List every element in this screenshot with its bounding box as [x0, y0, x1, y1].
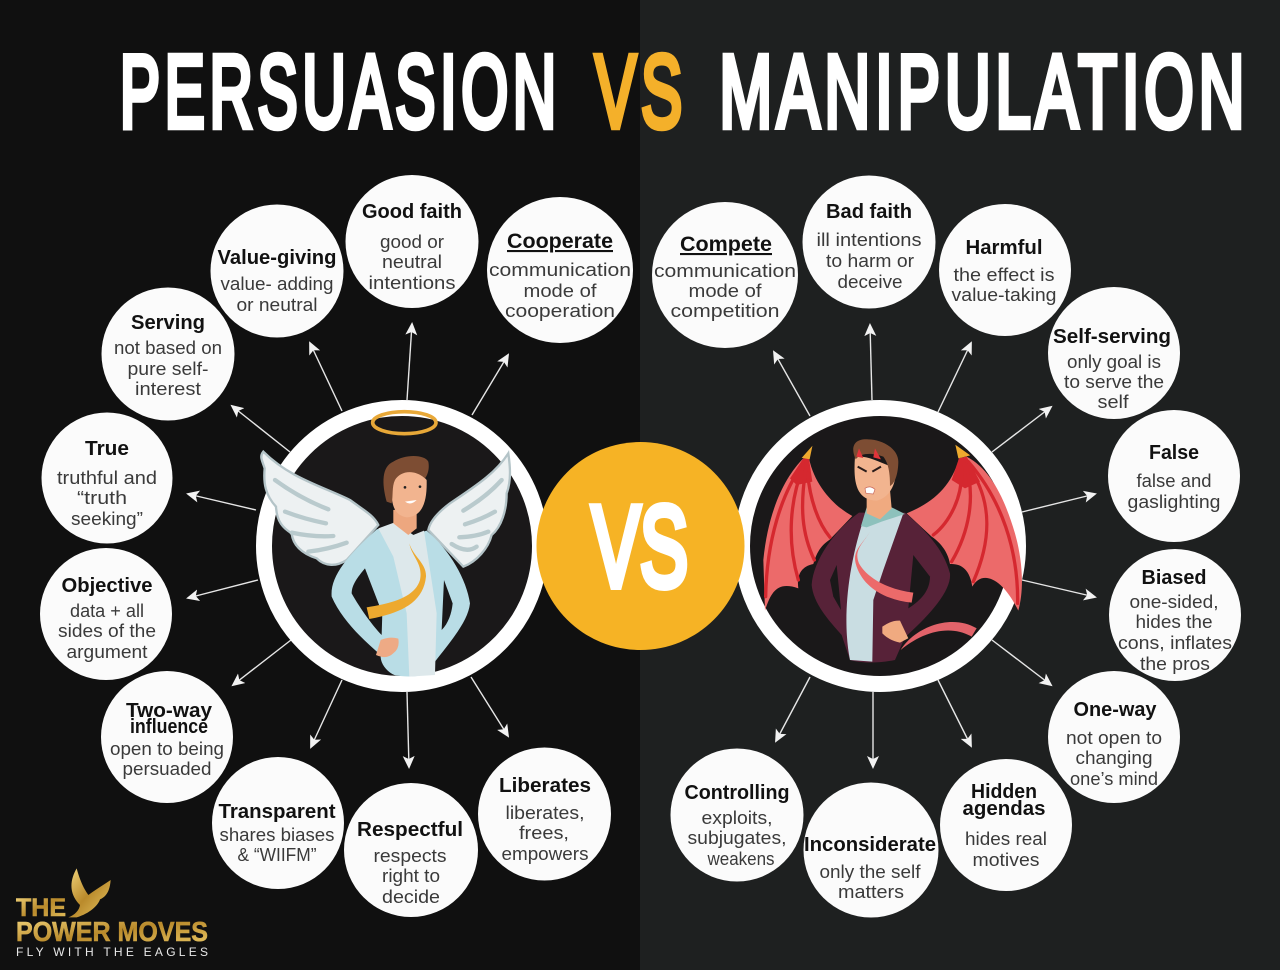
bubble: Biased: one-sided, [1130, 591, 1218, 612]
bubble: Liberates: frees, [519, 822, 569, 843]
bubble: Objective: Objective [62, 575, 152, 597]
bubble: Serving: pure self- [128, 358, 208, 379]
bubble: Two-way influence: influence [130, 716, 208, 738]
bubble: Cooperate: Cooperate [507, 230, 613, 253]
bubble: Good faith: intentions [368, 272, 456, 293]
bubble: Good faith: Good faith [362, 201, 462, 223]
bubble: Bad faith [802, 176, 936, 308]
bubble: Hidden agendas [940, 759, 1072, 891]
bubble: Compete: competition [670, 300, 780, 321]
bubble: True: seeking” [71, 508, 143, 529]
bubble: Good faith: neutral [382, 251, 442, 272]
bubble: One-way: changing [1076, 747, 1152, 768]
logo: The Power Moves: POWER MOVES [16, 916, 208, 947]
bubble: One-way: not open to [1066, 727, 1162, 748]
bubble: Controlling: exploits, [702, 807, 772, 828]
bubble: False: false and [1136, 470, 1212, 491]
bubble: True: truthful and [57, 467, 157, 488]
bubble: Two-way influence: open to being [110, 738, 224, 759]
bubble: Objective: sides of the [58, 620, 156, 641]
bubble: Compete [652, 202, 798, 348]
bubble: Good faith [346, 175, 478, 308]
bubble: Serving: Serving [131, 312, 205, 334]
bubble: Hidden agendas: Hidden [971, 781, 1037, 803]
bubble: Self-serving: self [1098, 391, 1129, 412]
bubble: Hidden agendas: agendas [962, 798, 1046, 820]
bubble: Biased: Biased [1142, 567, 1206, 589]
bubble: Value-giving: value- adding [220, 273, 334, 294]
bubble: Harmful: Harmful [966, 237, 1042, 259]
bubble: Bad faith: ill intentions [816, 229, 922, 250]
title: VS [595, 34, 687, 149]
bubble: One-way: One-way [1074, 699, 1157, 721]
bubble: Two-way influence: Two-way [126, 700, 213, 722]
bubble: False [1108, 410, 1240, 542]
bubble: Respectful: Respectful [357, 819, 463, 841]
bubble: Cooperate: mode of [524, 280, 597, 301]
logo: The Power Moves: FLY WITH THE EAGLES [16, 945, 208, 959]
bubble: Biased: cons, inflates [1118, 632, 1232, 653]
bubble: Transparent: & “WIIFM” [238, 844, 316, 865]
bubble: Transparent [212, 757, 344, 889]
bubble: Respectful: respects [374, 845, 446, 866]
bubble: Inconsiderate: Inconsiderate [804, 834, 936, 856]
bubble: Controlling [670, 748, 804, 882]
icon: angel illustration [261, 412, 510, 677]
bubble: Objective: argument [66, 641, 148, 662]
bubble: Biased: the pros [1140, 653, 1210, 674]
bubble: Controlling: Controlling [684, 782, 790, 804]
bubble: False: False [1149, 442, 1199, 464]
bubble: Hidden agendas: hides real [965, 828, 1047, 849]
bubble: Liberates: liberates, [506, 802, 584, 823]
bubble: Respectful [344, 783, 478, 917]
icon: devil illustration [763, 439, 1022, 662]
bubble: False: gaslighting [1128, 491, 1220, 512]
bubble: Harmful: the effect is [954, 264, 1054, 285]
bubble: Two-way influence: persuaded [122, 758, 212, 779]
bubble: Harmful: value-taking [952, 284, 1056, 305]
bubble: Compete: communication [654, 260, 796, 281]
title: PERSUASION [120, 34, 561, 149]
bubble: Objective [40, 548, 172, 680]
bubble: Transparent: shares biases [220, 824, 334, 845]
bubble: Bad faith: deceive [838, 271, 902, 292]
bubble: True: “truth [77, 487, 127, 508]
bubble: Serving: interest [135, 378, 201, 399]
bubble: Transparent: Transparent [218, 801, 336, 823]
bubble: Harmful [939, 204, 1071, 336]
bubble: Two-way influence [101, 671, 233, 803]
bubble: Cooperate [487, 197, 633, 343]
bubble: Self-serving: only goal is [1067, 351, 1161, 372]
bubble: One-way [1048, 671, 1180, 803]
bubble: Bad faith: Bad faith [826, 201, 912, 223]
bubble: Value-giving: or neutral [236, 294, 318, 315]
bubble: Liberates: Liberates [499, 775, 591, 797]
bubble: Controlling: weakens [707, 848, 774, 869]
arrows: manipulation traits [774, 325, 1095, 767]
bubble: Self-serving: Self-serving [1053, 326, 1171, 348]
bubble: Liberates [478, 748, 611, 880]
bubble: Biased [1109, 549, 1241, 681]
bubble: Inconsiderate [804, 782, 938, 918]
logo: The Power Moves [16, 868, 208, 959]
bubble: Serving [102, 288, 234, 420]
bubble: True: True [85, 438, 129, 460]
panel: manipulation background [640, 0, 1280, 970]
bubble: Bad faith: to harm or [826, 250, 914, 271]
bubble: Value-giving [210, 204, 344, 338]
bubble: One-way: one’s mind [1070, 768, 1158, 789]
manipulation ring with devil [742, 408, 1022, 684]
VS badge [536, 442, 744, 650]
bubble: Self-serving: to serve the [1064, 371, 1164, 392]
bubble: Respectful: right to [382, 865, 440, 886]
bubble: Compete: mode of [688, 280, 762, 301]
bubble: Cooperate: cooperation [505, 300, 615, 321]
bubble: Value-giving: Value-giving [218, 247, 336, 269]
bubble: Good faith: good or [380, 231, 444, 252]
bubble: Respectful: decide [382, 886, 440, 907]
bubble: Biased: hides the [1136, 611, 1212, 632]
icon: golden eagle [68, 868, 111, 917]
logo: The Power Moves: THE [16, 894, 66, 922]
persuasion ring with angel [261, 408, 540, 684]
bubble: Cooperate: communication [489, 259, 631, 280]
VS badge: VS [592, 484, 688, 611]
panel: persuasion background [0, 0, 640, 970]
bubble: Compete: Compete [680, 233, 772, 256]
bubble: Controlling: subjugates, [688, 827, 786, 848]
bubble: Self-serving [1048, 287, 1180, 419]
arrows: persuasion traits [188, 324, 508, 767]
bubble: Liberates: empowers [502, 843, 588, 864]
bubble: Hidden agendas: motives [972, 849, 1040, 870]
bubble: Inconsiderate: only the self [820, 861, 921, 882]
bubble: True [42, 412, 172, 544]
bubble: Serving: not based on [114, 337, 222, 358]
bubble: Objective: data + all [70, 600, 144, 621]
title [120, 34, 1249, 149]
bubble: Inconsiderate: matters [838, 881, 904, 902]
